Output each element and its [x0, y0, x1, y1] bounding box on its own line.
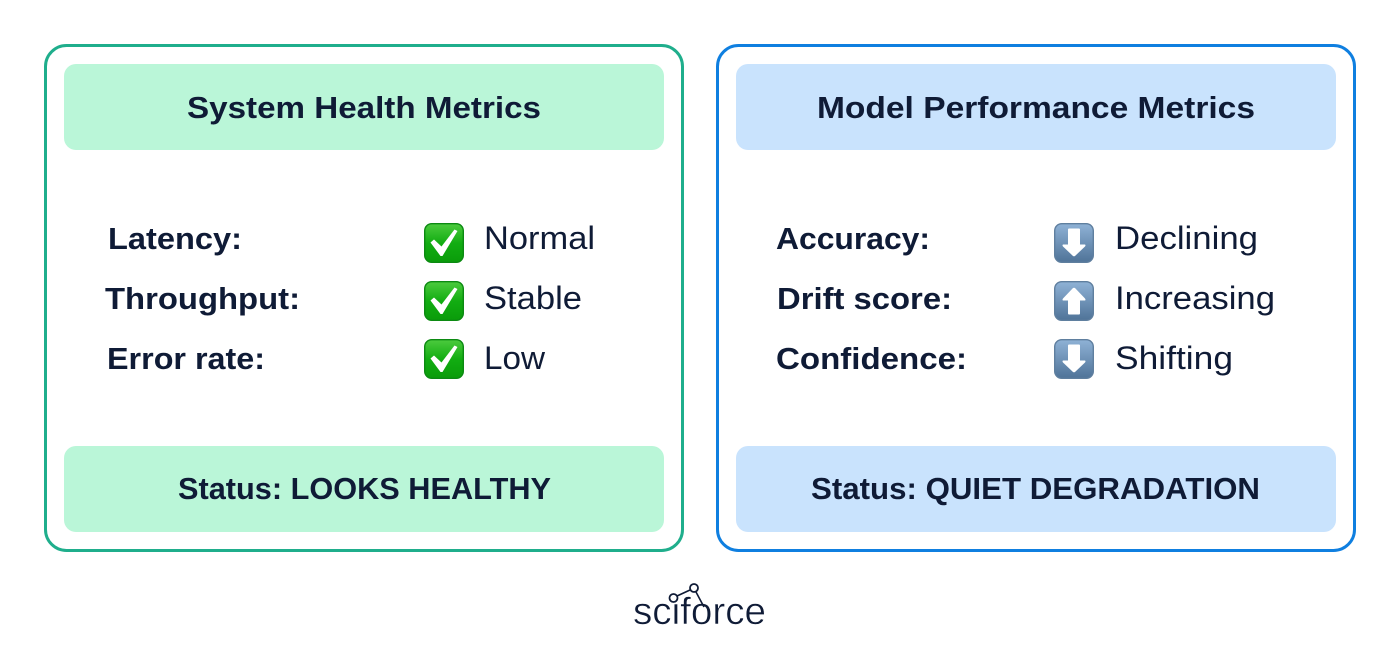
panel border: model performance: [718, 46, 1354, 550]
heading band: model performance: Model Performance Metrics: [817, 90, 1255, 125]
metric row: confidence: Confidence:: [776, 341, 967, 376]
metric row: confidence: [776, 340, 1233, 378]
heading band: model performance: [736, 64, 1336, 150]
metric row: error rate: Low: [484, 340, 546, 376]
status band: quiet degradation: [736, 446, 1336, 532]
panel: system health metrics: [46, 46, 682, 550]
heading band: system health: [64, 64, 664, 150]
status band: looks healthy: [64, 446, 664, 532]
metric row: throughput: Stable: [484, 280, 582, 316]
heading band: system health: System Health Metrics: [187, 90, 541, 125]
metric row: error rate: [107, 340, 546, 378]
status band: looks healthy: Status: LOOKS HEALTHY: [178, 471, 551, 506]
metric row: error rate: Error rate:: [107, 341, 265, 376]
panel border: system health: [46, 46, 682, 550]
metric row: latency: Latency:: [108, 221, 242, 256]
metric row: accuracy: [776, 220, 1258, 262]
logo: sciforce: sciforce: [633, 591, 766, 633]
metric row: drift score: Drift score:: [777, 281, 952, 316]
metric row: confidence: Shifting: [1115, 340, 1233, 376]
metric row: throughput: Throughput:: [105, 281, 300, 316]
metric row: drift score: [777, 280, 1275, 320]
panel: model performance metrics: [718, 46, 1354, 550]
metric row: throughput: [105, 280, 582, 320]
metric row: accuracy: Accuracy:: [776, 221, 930, 256]
metric row: drift score: Increasing: [1115, 280, 1275, 316]
metric row: latency: [108, 220, 595, 262]
metric row: accuracy: Declining: [1115, 220, 1258, 256]
status band: quiet degradation: Status: QUIET DEGRADATION: [811, 471, 1260, 506]
metric row: latency: Normal: [484, 220, 595, 256]
